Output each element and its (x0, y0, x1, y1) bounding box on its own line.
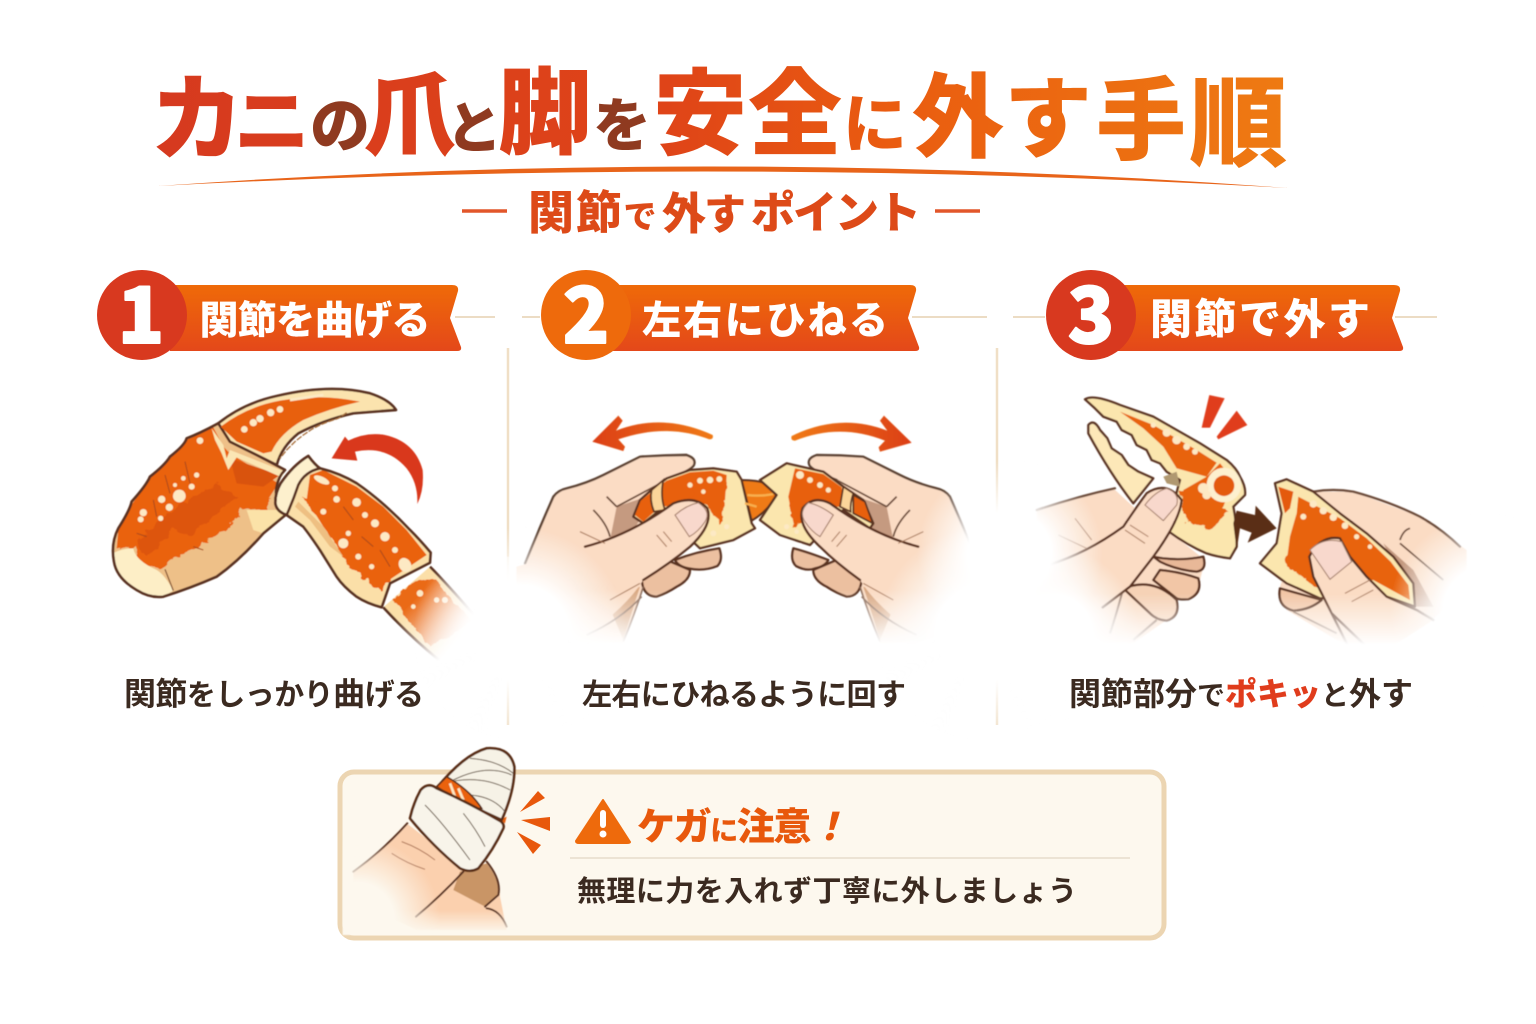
illustration: bending crab claw with arrow (113, 389, 510, 670)
claw piece (1085, 398, 1245, 558)
subtitle: 外 (662, 178, 706, 242)
subtitle: で (624, 190, 656, 238)
subtitle: ポイント (751, 177, 921, 241)
broken claw half (1260, 479, 1415, 607)
step 3 header: 3 (1068, 255, 1114, 365)
icon: warning triangle (576, 800, 630, 843)
title: 脚 (498, 38, 592, 174)
title: 外 (912, 44, 1004, 177)
panel: injury warning (338, 746, 1166, 940)
illustration: snapping the joint apart (917, 395, 1536, 720)
left hand back (517, 455, 695, 643)
title: を (593, 79, 651, 163)
title: と (446, 84, 502, 165)
step 3 caption: 関節部分でポキッと外す (1069, 676, 1413, 712)
dark separation arrow (1233, 506, 1277, 550)
impact marks (1202, 395, 1247, 439)
title: 安 (653, 39, 747, 175)
fade overlay (917, 460, 1536, 720)
title: 全 (748, 39, 842, 175)
left hand palm (1037, 488, 1205, 643)
warning box (340, 772, 1164, 938)
forearm segment (275, 456, 431, 607)
red curved arrow (332, 434, 423, 504)
title: す (1004, 49, 1092, 176)
left crab piece (633, 468, 776, 548)
step 1 caption: 関節をしっかり曲げる (124, 676, 424, 712)
palm segment (113, 423, 287, 597)
warning text: 無理に力を入れず丁寧に外しましょう (577, 875, 1077, 908)
step 2 header: 左右にひねる (642, 290, 888, 346)
title: ニ (234, 61, 310, 171)
icon: bandaged finger (342, 746, 516, 936)
step 1 header: 1 (118, 255, 164, 365)
step 1 header: 関節を曲げる (200, 290, 430, 346)
title: に (843, 74, 907, 166)
right hand (1279, 490, 1467, 650)
title underline swoosh (158, 166, 1288, 188)
title: 爪 (364, 42, 456, 175)
step 3 header: 関節で外す (1150, 286, 1370, 347)
subtitle: 節 (576, 177, 622, 243)
right hand back (809, 455, 987, 643)
left thumb (1037, 488, 1182, 607)
right thumb and fingers (792, 500, 987, 642)
step 2 caption: 左右にひねるように回す (582, 679, 906, 712)
left thumb and fingers (517, 500, 721, 642)
title: カ (150, 44, 244, 180)
title: 順 (1189, 45, 1287, 187)
icon: alert burst (517, 791, 550, 854)
right crab piece (760, 463, 873, 545)
step 2 header: 2 (563, 255, 609, 365)
step 3 header (1013, 255, 1437, 365)
left twist arrow (592, 416, 713, 451)
right thumb (1309, 538, 1433, 650)
step 1 header (97, 255, 495, 365)
title: 手 (1096, 48, 1186, 178)
subtitle: す (704, 181, 746, 242)
title: の (310, 78, 370, 165)
step 2 header (522, 255, 987, 365)
fade overlay (413, 527, 1090, 740)
subtitle (462, 177, 980, 243)
leg stub (383, 557, 510, 670)
column dividers (508, 348, 997, 725)
subtitle: 関 (528, 177, 574, 243)
warning heading: ケガに注意！ (637, 807, 848, 849)
title (150, 38, 1287, 187)
warning divider (570, 857, 1130, 859)
illustration: hands twisting the joint (413, 416, 1090, 740)
right twist arrow (791, 416, 912, 452)
movable finger (218, 389, 396, 465)
